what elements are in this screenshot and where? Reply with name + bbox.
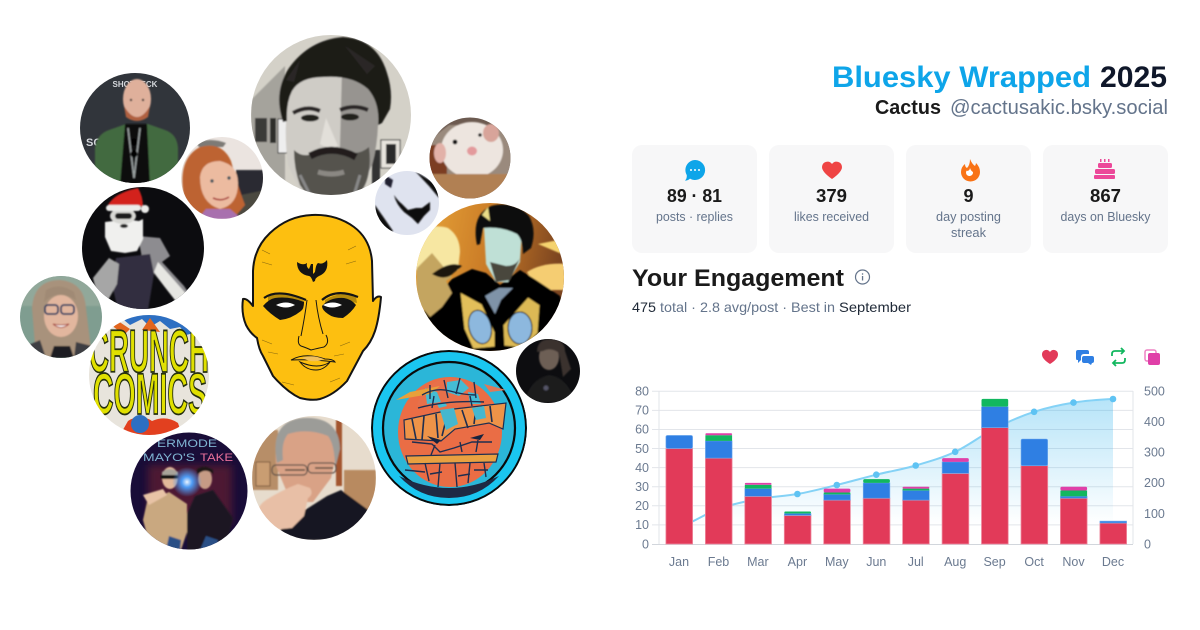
card: days on Bluesky: 867 xyxy=(1090,186,1121,206)
right axis labels: 0 xyxy=(1144,538,1151,552)
icon: replies xyxy=(1076,350,1094,365)
card: posting streak: day posting xyxy=(936,210,1001,224)
card: likes received xyxy=(769,145,894,253)
card: likes received: 379 xyxy=(816,186,847,206)
card: days on Bluesky xyxy=(1043,145,1168,253)
avatar: comic hero in gold armour xyxy=(416,203,567,352)
face: left eye mask xyxy=(263,298,304,320)
avatar: man in green jacket: SC xyxy=(86,137,101,149)
avatar: white rat xyxy=(429,117,511,200)
card: posts and replies: posts · replies xyxy=(656,210,733,224)
panel: avatar cluster: CRUNCH xyxy=(89,318,209,385)
avatar: man with glasses and hand on chin xyxy=(252,416,379,540)
avatar: podcast art with two men: MAYO'S xyxy=(143,452,195,464)
right axis labels: 300 xyxy=(1144,446,1165,460)
stacked bars: replies xyxy=(666,407,1127,523)
stacked bars: quotes xyxy=(705,433,1087,492)
panel: stat cards xyxy=(632,145,1168,253)
avatar: man in dark room xyxy=(516,339,580,403)
icon: info xyxy=(856,270,870,284)
user name and handle: @cactusakic.bsky.social xyxy=(950,97,1168,119)
title: 2025 xyxy=(1100,61,1167,94)
engagement summary: September xyxy=(839,299,911,315)
month labels: Dec xyxy=(1102,555,1124,569)
month labels: Jan xyxy=(669,555,689,569)
month labels: Apr xyxy=(788,555,807,569)
cumulative line xyxy=(679,399,1113,527)
stacked bars: likes xyxy=(666,428,1127,544)
icon: reposts xyxy=(1112,348,1125,366)
month labels: May xyxy=(825,555,849,569)
chart: monthly engagement xyxy=(635,384,1165,569)
engagement summary xyxy=(632,299,911,315)
face: lip highlight xyxy=(302,356,324,361)
right axis labels: 200 xyxy=(1144,476,1165,490)
right axis labels xyxy=(1144,384,1165,552)
month labels: Nov xyxy=(1062,555,1085,569)
avatar: orange rock hero in cyan roundel xyxy=(371,350,527,506)
avatar: podcast art with two men: ERMODE xyxy=(157,438,217,450)
face: eye shadow bands xyxy=(268,294,357,304)
month labels: Feb xyxy=(708,555,729,569)
avatar: smiling woman with glasses xyxy=(20,276,102,358)
panel: avatar cluster xyxy=(20,35,580,550)
stacked bars: reposts xyxy=(705,399,1087,514)
left axis labels: 70 xyxy=(635,404,649,418)
card: posting streak: 9 xyxy=(963,186,974,206)
icon: likes xyxy=(1042,350,1058,364)
month labels: Jul xyxy=(908,555,924,569)
user name and handle: Cactus xyxy=(875,97,941,119)
avatar: podcast art with two men: TAKE xyxy=(200,452,233,464)
avatar: black and white bearded man xyxy=(251,35,411,199)
card: days on Bluesky: days on Bluesky xyxy=(1060,210,1151,224)
left axis labels: 30 xyxy=(635,480,649,494)
chart grid xyxy=(652,391,1133,544)
avatar: woman with red hair xyxy=(181,137,266,220)
card: posting streak: streak xyxy=(951,226,987,240)
card: likes received: likes received xyxy=(794,210,869,224)
card: posts and replies: 89 · 81 xyxy=(667,186,722,206)
icon: quotes xyxy=(1145,350,1160,365)
title: Bluesky Wrapped xyxy=(832,61,1091,94)
face: right eye mask xyxy=(322,298,356,318)
avatar: podcast art with two men xyxy=(130,432,248,550)
engagement summary: total · 2.8 avg/post · Best in xyxy=(660,299,835,315)
engagement summary: 475 xyxy=(632,299,656,315)
left axis labels: 80 xyxy=(635,384,649,398)
heading: your engagement: Your Engagement xyxy=(632,265,844,292)
left axis labels: 10 xyxy=(635,518,649,532)
avatar: crunch comics logo: COMICS xyxy=(93,362,207,427)
month labels: Oct xyxy=(1024,555,1044,569)
right axis labels: 100 xyxy=(1144,507,1165,521)
face: brows and lines xyxy=(262,246,358,385)
central avatar: yellow masked face xyxy=(242,215,381,400)
cumulative points xyxy=(794,396,1116,497)
month labels xyxy=(669,555,1124,569)
face: forehead emblem xyxy=(297,260,327,282)
avatar: white hero in santa hat xyxy=(82,187,204,310)
avatar: man in green jacket xyxy=(80,73,190,185)
left axis labels: 60 xyxy=(635,422,649,436)
face: eye highlights xyxy=(276,302,342,308)
month labels: Mar xyxy=(747,555,769,569)
month labels: Aug xyxy=(944,555,966,569)
month labels: Sep xyxy=(983,555,1006,569)
avatar: man in green jacket: SHOTDECK xyxy=(113,80,158,89)
right axis labels: 500 xyxy=(1144,384,1165,398)
chart legend xyxy=(1042,348,1160,366)
icon: birthday cake xyxy=(1094,159,1115,179)
left axis labels: 0 xyxy=(642,538,649,552)
right axis labels: 400 xyxy=(1144,415,1165,429)
left axis labels xyxy=(635,384,649,552)
card: posting streak xyxy=(906,145,1031,253)
avatar: black ink on pale background xyxy=(375,171,439,235)
icon: chat bubble xyxy=(685,160,705,181)
icon: heart xyxy=(822,162,842,179)
avatar: crunch comics logo xyxy=(89,313,209,435)
left axis labels: 50 xyxy=(635,442,649,456)
left axis labels: 40 xyxy=(635,461,649,475)
cumulative area xyxy=(679,399,1113,544)
left axis labels: 20 xyxy=(635,499,649,513)
month labels: Jun xyxy=(866,555,886,569)
icon: flame xyxy=(961,159,980,182)
card: posts and replies xyxy=(632,145,757,253)
